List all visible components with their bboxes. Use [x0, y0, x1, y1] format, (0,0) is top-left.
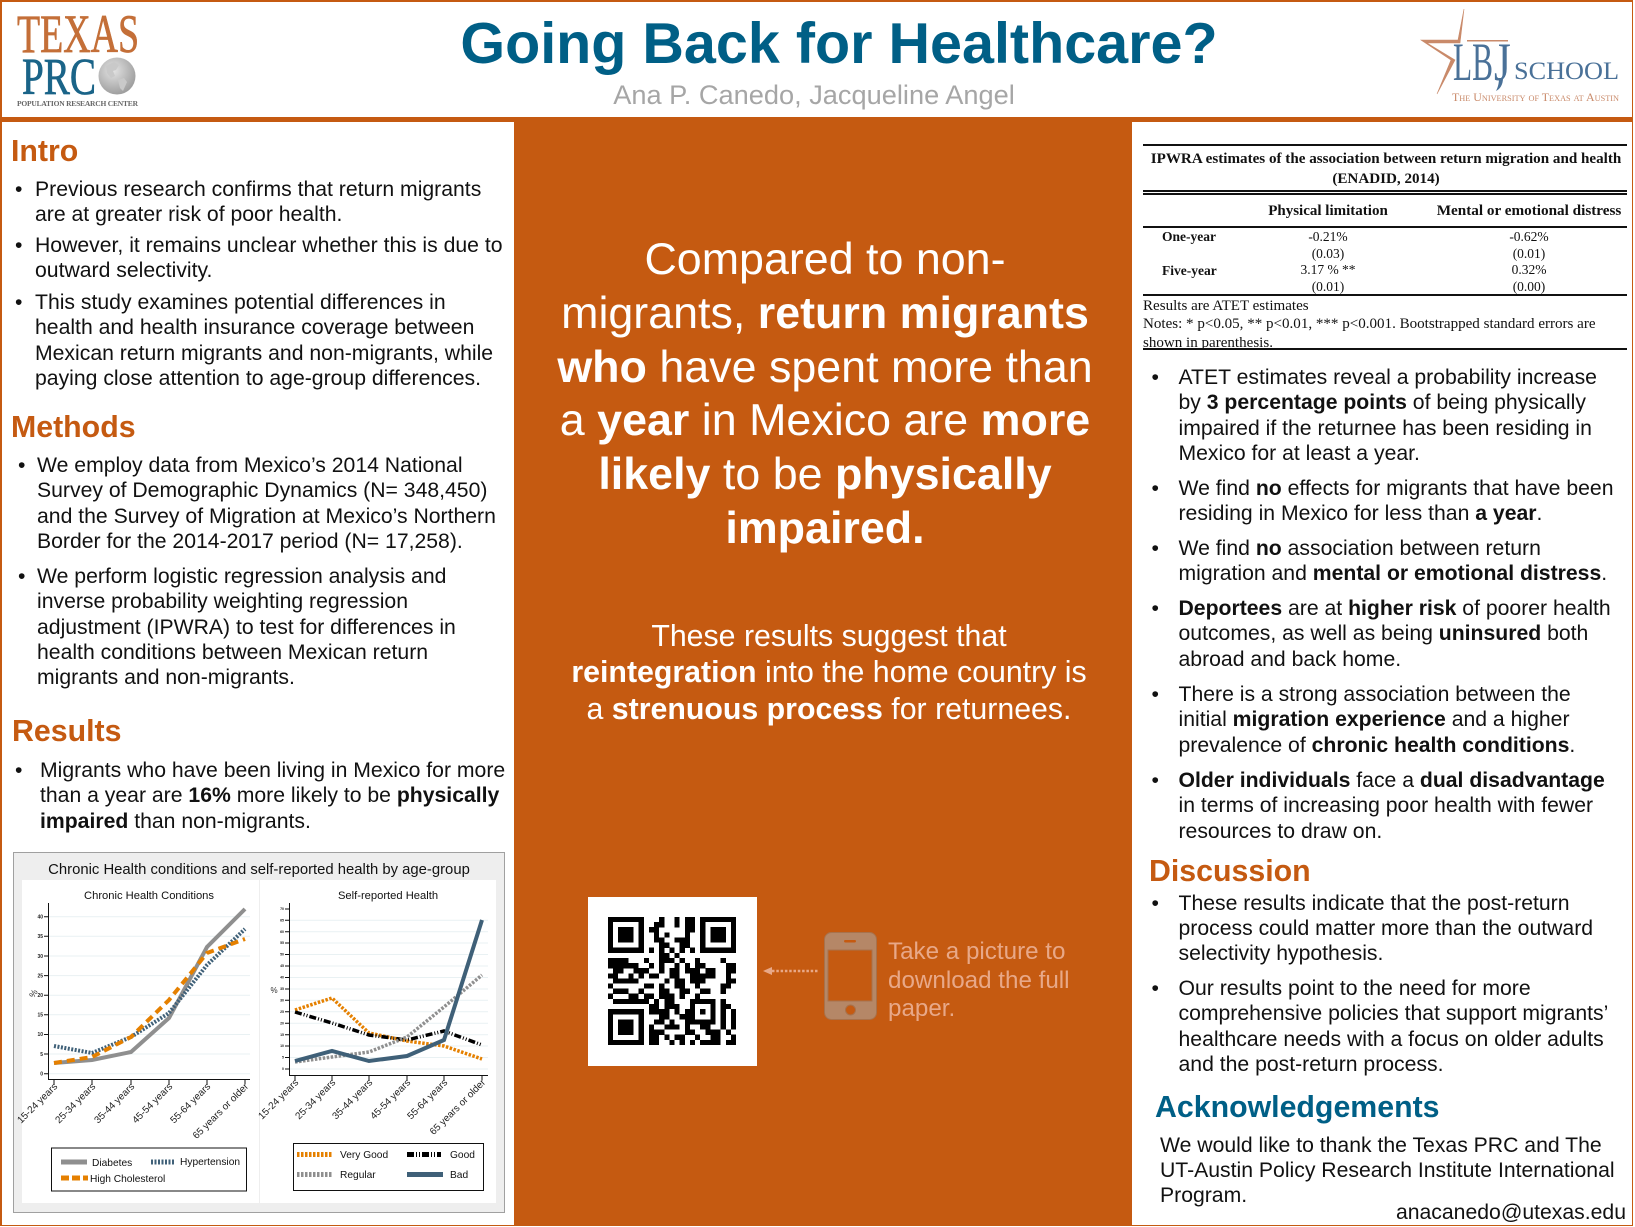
logo: Texas PRC: POPULATION RESEARCH CENTER — [17, 99, 139, 108]
key finding statement: Compared to non- — [644, 234, 1006, 284]
text: • — [15, 234, 22, 257]
chart: chronic health conditions: 20 — [37, 993, 43, 999]
chart: chronic health conditions: 40 — [37, 914, 43, 920]
chart: self-reported health: 0 — [282, 1067, 284, 1071]
implication statement: reintegration into the home country is — [571, 656, 1087, 689]
chart: chronic health conditions: 25-34 years — [53, 1081, 98, 1126]
text: results bullet 1: ATET estimates reveal a probability increase — [1178, 366, 1597, 389]
chart: chronic health conditions: 35 — [37, 934, 43, 940]
text: • — [15, 759, 22, 782]
logo: Texas PRC: PRC — [22, 49, 96, 106]
column values: mental distress: (0.01) — [1513, 246, 1545, 261]
text: results bullet 3 — [1152, 537, 1607, 585]
chart: self-reported health: 55-64 years — [405, 1077, 450, 1122]
text: methods bullet 2: We perform logistic regression analysis and — [37, 565, 446, 588]
text: • — [18, 454, 25, 477]
text: methods bullet 2: health conditions between Mexican return — [37, 641, 428, 664]
table notes — [1143, 298, 1596, 350]
chart: self-reported health: 60 — [280, 930, 284, 934]
header band — [2, 2, 1632, 117]
key finding statement — [557, 234, 1093, 553]
chart: chronic health conditions: Chronic Health Conditions — [84, 890, 214, 902]
implication statement: These results suggest that — [651, 620, 1007, 652]
chart: self-reported health: 20 — [280, 1022, 284, 1026]
chart: self-reported health: 25 — [280, 1010, 284, 1014]
chart: chronic health conditions: 35-44 years — [92, 1081, 137, 1126]
row labels: One-year — [1162, 229, 1216, 244]
text: intro bullet 2: However, it remains unclear whether this is due to — [35, 234, 503, 257]
text: results bullet — [15, 759, 505, 833]
row labels — [1162, 229, 1217, 278]
chart: chronic health conditions: 15 — [37, 1012, 43, 1018]
authors: Ana P. Canedo, Jacqueline Angel — [613, 79, 1015, 110]
text: • — [15, 178, 22, 201]
text: results bullet 1: by 3 percentage points of being physically — [1178, 391, 1586, 414]
text: acknowledgements: We would like to thank the Texas PRC and The — [1160, 1134, 1602, 1156]
column values: mental distress: (0.00) — [1513, 279, 1545, 294]
QR code — [588, 897, 757, 1066]
text: methods bullet 1: and the Survey of Migration at Mexico’s Northern — [37, 505, 496, 528]
chart: self-reported health: 70 — [280, 907, 284, 911]
legend: chronic conditions: High Cholesterol — [90, 1174, 165, 1185]
column values: physical limitation — [1300, 229, 1356, 294]
text: intro bullet 3: Mexican return migrants and non-migrants, while — [35, 342, 493, 365]
text: results bullet 6: resources to draw on. — [1178, 820, 1382, 843]
panel: left column — [2, 122, 514, 1225]
column values: physical limitation: -0.21% — [1308, 229, 1348, 244]
text: methods bullet 2: adjustment (IPWRA) to test for differences in — [37, 616, 456, 639]
text: QR instructions: paper. — [888, 995, 955, 1022]
table title — [1151, 151, 1622, 187]
text: discussion bullet 1: selectivity hypothesis. — [1178, 942, 1383, 965]
logo: LBJ School: The University of Texas at Austin — [1452, 92, 1619, 104]
column header: physical limitation: Physical limitation — [1268, 203, 1388, 219]
chart: self-reported health: 35-44 years — [330, 1077, 375, 1122]
text: discussion bullet 2 — [1152, 977, 1608, 1076]
key finding statement: likely to be physically — [598, 449, 1052, 499]
column values: physical limitation: 3.17 % ** — [1300, 262, 1356, 277]
text: methods bullet 1: We employ data from Mexico’s 2014 National — [37, 454, 463, 477]
text: methods bullet 1: Border for the 2014-2017 period (N= 17,258). — [37, 530, 463, 553]
row labels: Five-year — [1162, 262, 1217, 278]
text: discussion bullet 2: and the post-return process. — [1178, 1053, 1444, 1076]
table notes: Notes: * p<0.05, ** p<0.01, *** p<0.001. Bootstrapped standard errors are — [1143, 316, 1596, 332]
text: • — [1152, 769, 1159, 792]
chart: chronic health conditions: 55-64 years — [168, 1081, 213, 1126]
text: intro bullet 3: This study examines potential differences in — [35, 291, 446, 314]
column values: physical limitation: (0.01) — [1312, 279, 1344, 294]
chart: self-reported health: 45 — [280, 964, 284, 968]
legend: self-reported health — [294, 1144, 484, 1190]
text: discussion bullet 2: Our results point to the need for more — [1178, 977, 1531, 1000]
chart: chronic health conditions: 45-54 years — [130, 1081, 175, 1126]
chart: chronic health conditions: 25 — [37, 974, 43, 980]
heading: Intro: Intro — [11, 135, 78, 168]
text: intro bullet 3: paying close attention to age-group differences. — [35, 367, 481, 390]
legend: self-reported health: Good — [450, 1150, 475, 1161]
table title: IPWRA estimates of the association between return migration and health — [1151, 151, 1621, 167]
text: results bullet 2: residing in Mexico for less than a year. — [1178, 502, 1542, 525]
text: results bullet: Migrants who have been living in Mexico for more — [40, 759, 505, 782]
text: results bullet 6: in terms of increasing poor health with fewer — [1178, 794, 1593, 817]
text: QR instructions: download the full — [888, 966, 1070, 994]
logo: LBJ School: LB — [1453, 32, 1493, 92]
chart: self-reported health: 55 — [280, 941, 284, 945]
text: intro bullet 1 — [15, 178, 481, 226]
chart: self-reported health: 35 — [280, 987, 284, 991]
chart: chronic health conditions: 0 — [40, 1072, 43, 1078]
legend: self-reported health: Very Good — [340, 1150, 388, 1161]
column values: mental distress: -0.62% — [1509, 229, 1549, 244]
panel: right column — [1132, 122, 1632, 1225]
column values: physical limitation: (0.03) — [1312, 246, 1344, 261]
panel: chart figure — [13, 852, 505, 1213]
text: results bullet 6 — [1152, 769, 1605, 843]
heading: Results: Results — [12, 715, 121, 748]
heading: Acknowledgements: Acknowledgements — [1155, 1091, 1440, 1124]
text: results bullet 1: Mexico for at least a year. — [1178, 442, 1420, 465]
chart: self-reported health: 65 — [280, 918, 284, 922]
table title: (ENADID, 2014) — [1332, 171, 1440, 187]
legend: chronic conditions: Diabetes — [92, 1158, 132, 1169]
chart: self-reported health: Self-reported Health — [338, 890, 438, 902]
heading: Methods: Methods — [11, 411, 136, 444]
text: intro bullet 3: health and health insurance coverage between — [35, 316, 474, 339]
chart: self-reported health: 45-54 years — [368, 1077, 413, 1122]
text: intro bullet 2 — [15, 234, 503, 282]
key finding statement: a year in Mexico are more — [560, 395, 1090, 445]
text: results bullet 2: We find no effects for migrants that have been — [1178, 476, 1613, 500]
text: methods bullet 2 — [18, 565, 456, 689]
text: results bullet 5: prevalence of chronic health conditions. — [1178, 734, 1575, 757]
text: discussion bullet 1: process could matter more than the outward — [1178, 917, 1593, 940]
text: results bullet 4: outcomes, as well as being uninsured both — [1178, 622, 1588, 645]
title: Going Back for Healthcare? — [460, 12, 1218, 76]
text: results bullet 1: impaired if the returnee has been residing in — [1178, 417, 1592, 440]
heading: Discussion: Discussion — [1149, 855, 1311, 888]
text: acknowledgements: UT-Austin Policy Research Institute International — [1160, 1159, 1615, 1182]
chart: self-reported health: 25-34 years — [293, 1077, 338, 1122]
arrow: phone to QR code — [763, 967, 818, 975]
chart: chronic health conditions: % — [27, 988, 40, 999]
text: results bullet 2 — [1152, 476, 1613, 525]
text: results bullet: impaired than non-migrants. — [40, 810, 311, 833]
logo: Texas PRC — [17, 4, 139, 108]
text: • — [1152, 476, 1159, 500]
column header: mental distress: Mental or emotional distress — [1437, 202, 1621, 219]
text: acknowledgements: Program. — [1160, 1184, 1247, 1207]
text: • — [1152, 537, 1159, 560]
text: discussion bullet 2: healthcare needs with a focus on older adults — [1178, 1028, 1604, 1051]
chart: self-reported health: 40 — [280, 976, 284, 980]
text: methods bullet 2: migrants and non-migrants. — [37, 666, 295, 689]
text: results bullet 3: We find no association between return — [1178, 537, 1541, 560]
legend: self-reported health: Bad — [450, 1170, 468, 1181]
chart: self-reported health: 15-24 years — [256, 1077, 301, 1122]
icon: smartphone — [824, 932, 877, 1020]
table notes: Results are ATET estimates — [1143, 298, 1309, 314]
legend: chronic conditions: Hypertension — [180, 1157, 240, 1168]
text: intro bullet 1: Previous research confirms that return migrants — [35, 178, 481, 201]
text: results bullet 4: abroad and back home. — [1178, 648, 1401, 671]
key finding statement: who have spent more than — [557, 342, 1093, 392]
text: discussion bullet 1 — [1152, 892, 1593, 965]
table notes: shown in parenthesis. — [1143, 334, 1273, 350]
chart: self-reported health: 65 years or older — [428, 1077, 489, 1138]
chart: chronic health conditions: 10 — [37, 1032, 43, 1038]
key finding statement: impaired. — [725, 503, 925, 553]
chart: chronic health conditions: 65 years or older — [191, 1081, 252, 1142]
text: • — [1152, 366, 1159, 389]
text: intro bullet 1: are at greater risk of poor health. — [35, 203, 342, 226]
text: acknowledgements — [1160, 1134, 1615, 1207]
chart: chronic health conditions: 30 — [37, 954, 43, 960]
text: methods bullet 1 — [18, 454, 496, 553]
text: QR instructions — [888, 938, 1070, 1022]
text: results bullet 5: There is a strong association between the — [1178, 683, 1571, 706]
logo: Texas PRC: TEXAS — [17, 4, 139, 64]
implication statement — [571, 620, 1087, 726]
table: IPWRA estimates — [1143, 144, 1627, 350]
text: results bullet 5: initial migration experience and a higher — [1178, 708, 1570, 731]
text: • — [18, 565, 25, 588]
column values: mental distress — [1509, 229, 1549, 294]
chart: self-reported health: 15 — [280, 1033, 284, 1037]
text: • — [1152, 683, 1159, 706]
chart: chronic health conditions: 15-24 years — [15, 1081, 60, 1126]
chart: self-reported health: 30 — [280, 998, 284, 1002]
legend: self-reported health: Regular — [340, 1170, 376, 1181]
text: • — [1152, 892, 1159, 914]
text: discussion bullet 1: These results indicate that the post-return — [1178, 892, 1570, 914]
text: results bullet 6: Older individuals face a dual disadvantage — [1178, 769, 1605, 792]
text: results bullet 5 — [1152, 683, 1575, 757]
column values: mental distress: 0.32% — [1512, 262, 1546, 277]
text: • — [15, 291, 22, 314]
chart: chronic health conditions: 5 — [40, 1052, 43, 1058]
chart: self-reported health: 5 — [282, 1056, 284, 1060]
figure title: Chronic Health conditions and self-reported health by age-group — [48, 862, 470, 878]
text: results bullet 4: Deportees are at higher risk of poorer health — [1178, 597, 1611, 620]
text: QR instructions: Take a picture to — [888, 938, 1065, 965]
chart: self-reported health: 10 — [280, 1044, 284, 1048]
implication statement: a strenuous process for returnees. — [587, 692, 1071, 726]
text: • — [1152, 977, 1159, 1000]
text: discussion bullet 2: comprehensive policies that support migrants’ — [1178, 1002, 1608, 1025]
logo: LBJ School — [1420, 9, 1619, 104]
chart: self-reported health: % — [270, 986, 278, 995]
text: results bullet 3: migration and mental or emotional distress. — [1178, 562, 1607, 585]
logo: LBJ School: J — [1494, 31, 1511, 92]
chart: self-reported health: 50 — [280, 952, 284, 956]
text: methods bullet 1: Survey of Demographic Dynamics (N= 348,450) — [37, 479, 487, 502]
legend: chronic conditions — [52, 1148, 246, 1191]
key finding statement: migrants, return migrants — [561, 288, 1089, 338]
logo: LBJ School: SCHOOL — [1514, 58, 1619, 85]
text: intro bullet 3 — [15, 291, 493, 390]
text: • — [1152, 597, 1159, 620]
text: methods bullet 2: inverse probability weighting regression — [37, 590, 408, 613]
text: contact email: anacanedo@utexas.edu — [1396, 1201, 1626, 1224]
text: intro bullet 2: outward selectivity. — [35, 259, 212, 282]
text: results bullet 1 — [1152, 366, 1597, 465]
text: results bullet 4 — [1152, 597, 1611, 671]
text: results bullet: than a year are 16% more likely to be physically — [40, 784, 499, 807]
